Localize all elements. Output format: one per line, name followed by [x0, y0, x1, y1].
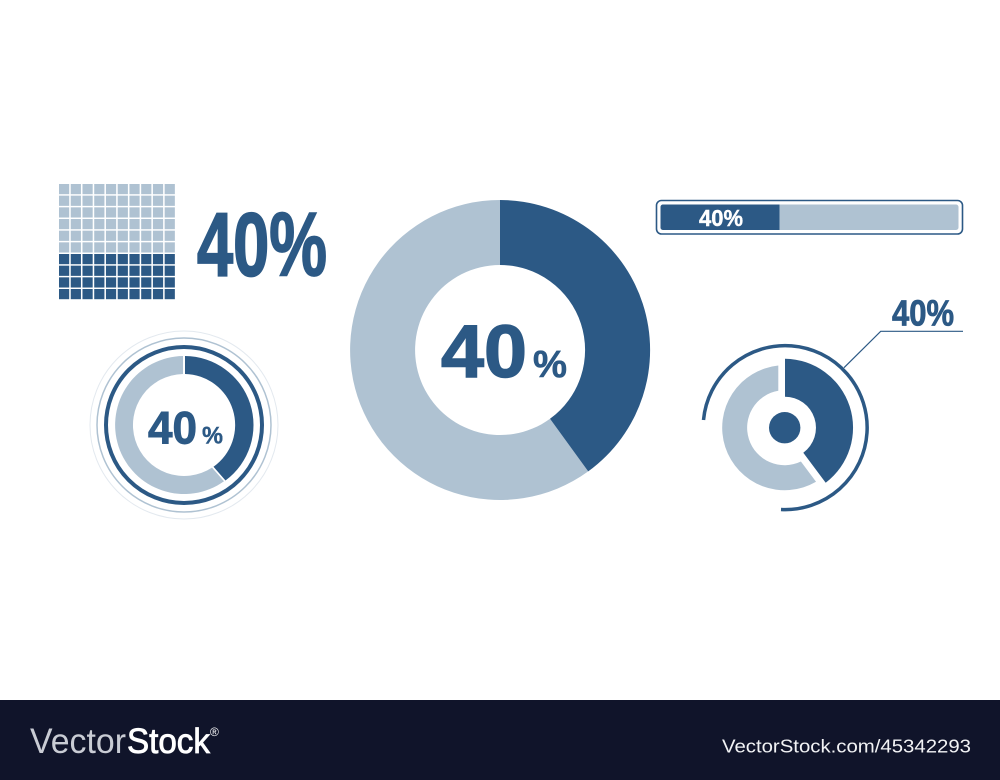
callout leader line — [844, 331, 963, 368]
progress bar value label: 40% — [699, 205, 743, 231]
large donut: remaining 60 percent — [350, 200, 588, 500]
segmented donut: filled 40 percent — [785, 359, 853, 483]
progress bar fill — [660, 204, 780, 230]
progress bar — [656, 200, 962, 234]
ringed donut value label: % — [202, 422, 223, 450]
segmented donut outer arc — [704, 346, 867, 510]
ringed donut: remaining 60 percent — [115, 356, 224, 494]
progress bar track — [660, 204, 958, 230]
large donut: filled 40 percent — [500, 200, 650, 471]
outer thin ring — [97, 338, 271, 512]
footer background — [0, 700, 1000, 780]
image id: VectorStock.com/45342293 — [722, 736, 971, 756]
waffle chart: 40 percent — [59, 184, 175, 299]
VectorStock logo: Vector — [30, 722, 126, 761]
VectorStock logo: ® — [210, 725, 219, 739]
ringed donut chart — [90, 331, 278, 519]
waffle chart value label: 40% — [197, 196, 327, 296]
segmented donut chart with callout — [704, 292, 963, 510]
VectorStock logo: Stock — [127, 722, 210, 761]
ringed donut: filled 40 percent — [185, 356, 254, 480]
progress bar frame — [656, 200, 962, 234]
large donut chart — [350, 200, 650, 500]
callout value label: 40% — [892, 292, 954, 334]
segmented donut center dot — [769, 412, 800, 443]
segmented donut: remaining 60 percent — [722, 366, 816, 490]
dark ring — [106, 347, 262, 503]
large donut value label: % — [533, 344, 567, 386]
ringed donut value label: 40 — [148, 402, 197, 454]
footer bar — [0, 700, 1000, 780]
outer faint ring — [90, 331, 278, 519]
large donut value label: 40 — [441, 310, 527, 393]
